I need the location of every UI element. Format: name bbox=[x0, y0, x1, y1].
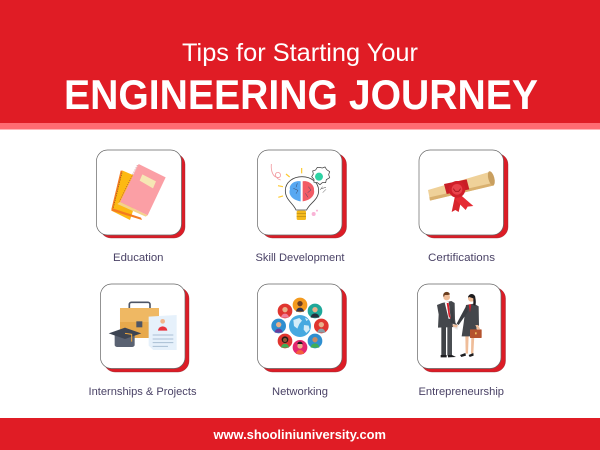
panel: education bbox=[96, 150, 185, 264]
panel: skill development bbox=[256, 150, 346, 264]
footer band bbox=[0, 418, 600, 450]
icon: business handshake bbox=[437, 292, 482, 357]
icon: scroll with seal bbox=[428, 170, 496, 212]
panel: networking bbox=[258, 284, 346, 398]
label: Entrepreneurship bbox=[418, 386, 504, 398]
title line 2: ENGINEERING JOURNEY bbox=[64, 71, 538, 118]
icon: notebooks bbox=[111, 164, 166, 220]
title line 1: Tips for Starting Your bbox=[182, 39, 418, 67]
icon: briefcase, cap and resume bbox=[109, 302, 177, 350]
header band bbox=[0, 0, 600, 130]
icon: lightbulb brain bbox=[271, 164, 330, 220]
label: Education bbox=[113, 252, 164, 264]
panel: entrepreneurship bbox=[418, 284, 506, 398]
label: Networking bbox=[272, 386, 328, 398]
label: Skill Development bbox=[256, 252, 344, 264]
website url: www.shooliniuniversity.com bbox=[212, 428, 386, 442]
label: Internships & Projects bbox=[88, 386, 197, 398]
panel: internships and projects bbox=[88, 284, 197, 398]
icon: globe with people bbox=[271, 298, 329, 355]
label: Certifications bbox=[428, 252, 496, 264]
panel: certifications bbox=[419, 150, 508, 264]
